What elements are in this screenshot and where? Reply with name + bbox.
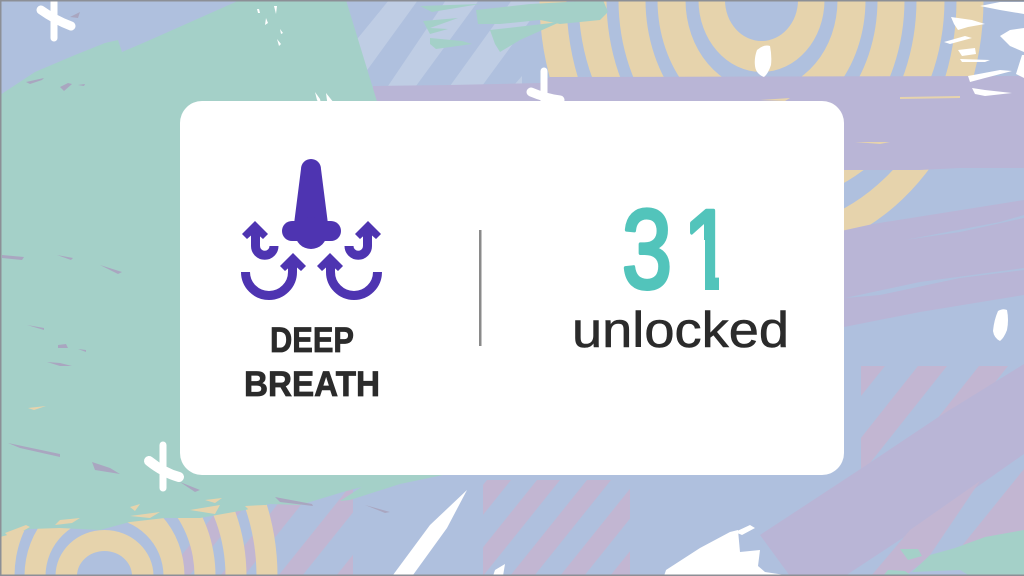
arrow: large right xyxy=(317,253,378,296)
light diagonal stripes top xyxy=(340,0,545,86)
label: unlocked: unlocked xyxy=(572,302,789,358)
white blob top xyxy=(755,46,771,77)
white blob bottom left xyxy=(493,564,505,576)
purple band lower right xyxy=(800,200,1024,340)
white cross centre xyxy=(531,71,560,108)
green brush trail over bands xyxy=(225,475,443,513)
white scratches top right xyxy=(944,2,1024,96)
number: 31: 1 xyxy=(683,187,733,312)
number: 31 xyxy=(624,207,719,291)
tan flecks on purple band xyxy=(760,96,960,144)
icon: nose with breath arrows xyxy=(242,159,381,296)
white brush patch bottom xyxy=(664,525,785,576)
heading: deep breath xyxy=(244,321,380,404)
heading: deep breath: DEEP xyxy=(270,321,354,360)
purple band upper xyxy=(373,76,1024,170)
white cross lower left xyxy=(149,445,179,488)
purple band diagonal xyxy=(760,364,1024,576)
white scratches top centre xyxy=(257,6,338,108)
pink stripes bottom centre xyxy=(483,480,630,574)
concentric rings top right xyxy=(540,0,984,258)
number: 31: 3 xyxy=(622,187,672,312)
white cross top left xyxy=(41,0,71,38)
arrow: small right xyxy=(349,221,381,255)
divider xyxy=(479,230,482,346)
tan flecks on green xyxy=(5,406,268,538)
green splashes top xyxy=(420,0,608,52)
white panel xyxy=(180,101,844,475)
green painted shape xyxy=(0,0,440,537)
arrow: small left xyxy=(242,221,274,255)
light streaks in purple band xyxy=(845,215,1024,298)
white brush slash bottom xyxy=(393,490,467,575)
pink stripes lower right xyxy=(861,366,1008,468)
pink stripes bottom left xyxy=(182,490,353,574)
heading: deep breath: BREATH xyxy=(244,365,380,404)
grey specks on green and blue xyxy=(2,12,390,513)
white blob right xyxy=(993,309,1008,341)
arrow: large left xyxy=(246,253,306,296)
pink stripes bottom right xyxy=(871,469,1024,576)
green patch bottom right xyxy=(883,530,1024,576)
concentric rings bottom left xyxy=(0,370,278,576)
nose xyxy=(282,159,341,249)
